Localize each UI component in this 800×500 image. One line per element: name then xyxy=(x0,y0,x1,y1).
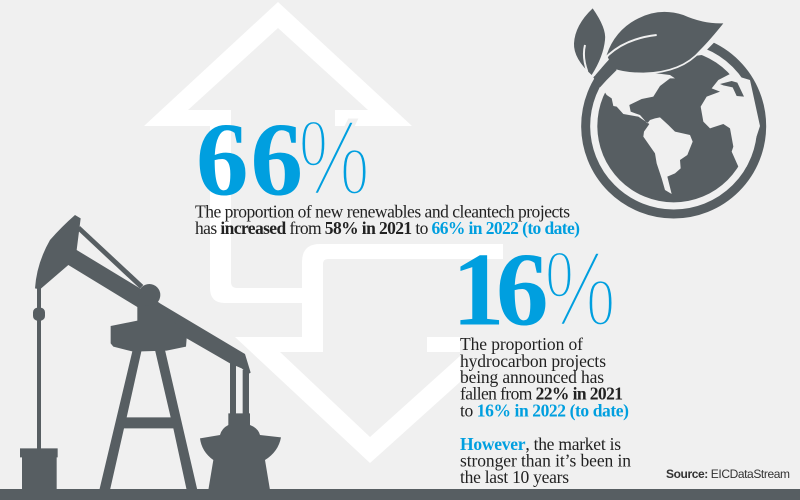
text block: market note xyxy=(460,434,631,487)
motor xyxy=(200,413,281,490)
icon: oil pumpjack xyxy=(20,215,281,490)
small leaf xyxy=(574,8,605,75)
globe disc xyxy=(597,50,750,202)
up arrow xyxy=(144,2,412,303)
down arrow xyxy=(235,244,503,463)
landmass: island xyxy=(720,81,744,97)
text block: hydrocarbons xyxy=(460,334,629,420)
statistic: 16%: 1 xyxy=(452,230,504,348)
leaf veins xyxy=(584,35,657,75)
bearing xyxy=(138,284,160,306)
text block: renewables: has increased from 58% in 2021 to 66% in 2022 (to date) xyxy=(195,218,580,238)
text block: market note: stronger than it’s been in xyxy=(460,450,631,470)
ring join xyxy=(593,58,617,87)
statistic: 66%: 66 xyxy=(196,100,305,218)
rods xyxy=(230,363,236,415)
text block: hydrocarbons: fallen from 22% in 2021 xyxy=(460,384,623,404)
text block: market note: However, the market is xyxy=(460,434,621,454)
source note: Source: EICDataStream xyxy=(666,467,790,481)
text block: hydrocarbons: hydrocarbon projects xyxy=(460,351,606,371)
globe ring xyxy=(586,38,762,214)
text block: hydrocarbons: The proportion of xyxy=(460,334,583,354)
gap between ring and leaf tip xyxy=(690,20,733,57)
landmass: east xyxy=(701,74,760,167)
landmass: north-west coast and south america xyxy=(602,68,693,194)
statistic: 66%: % xyxy=(298,99,370,219)
text block: renewables xyxy=(195,202,580,238)
statistic: 16% xyxy=(452,230,616,350)
cable xyxy=(78,226,143,289)
legs xyxy=(99,350,197,490)
text block: market note: the last 10 years xyxy=(460,467,569,487)
text block: hydrocarbons: being announced has xyxy=(460,367,604,387)
platform xyxy=(111,303,187,352)
well bucket xyxy=(20,448,58,490)
statistic: 16%: % xyxy=(544,230,616,350)
statistic: 16%: 6 xyxy=(496,230,548,348)
ground bar xyxy=(0,489,800,500)
walking beam and horsehead xyxy=(35,215,251,374)
text block: hydrocarbons: to 16% in 2022 (to date) xyxy=(460,400,629,420)
statistic: 66% xyxy=(196,99,370,219)
big leaf xyxy=(607,12,723,73)
icon: globe with leaves xyxy=(574,8,762,214)
polished rod xyxy=(37,288,41,450)
text block: renewables: The proportion of new renewables and cleantech projects xyxy=(195,202,570,222)
icon: white up and down arrows xyxy=(144,2,503,463)
